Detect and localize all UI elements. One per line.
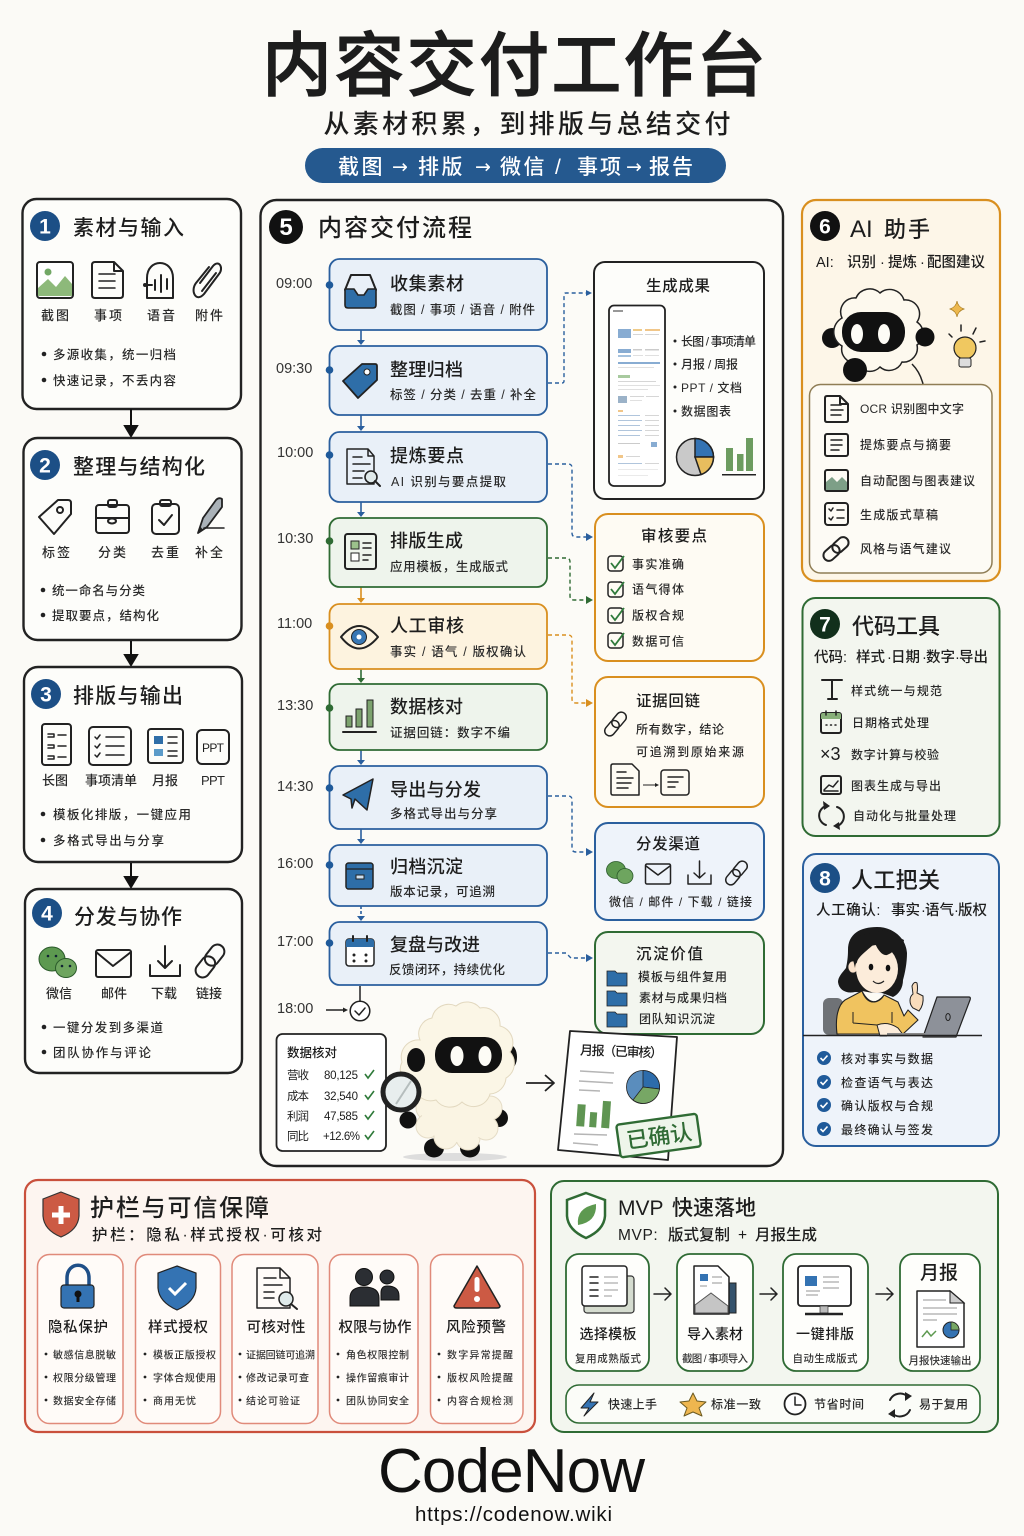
labels: 截图 <box>41 308 69 323</box>
tools list <box>810 384 992 573</box>
card: 导入素材 <box>677 1254 753 1371</box>
labels: 语音 <box>147 308 175 323</box>
icon: clipboard check <box>152 500 179 534</box>
report pie <box>626 1070 660 1104</box>
panel 6: AI 助手: · <box>920 255 925 271</box>
panel: MVP 快速落地: 快速落地 <box>672 1197 756 1220</box>
card: 证据回链: 可追溯到原始来源 <box>636 744 744 759</box>
labels: 事项 <box>94 308 122 323</box>
icon: clock <box>784 1394 806 1414</box>
monthly report: 月报（已审核） <box>580 1043 663 1060</box>
timeline times: 18:00 <box>277 1001 313 1017</box>
panel 7: 代码工具: 代码: <box>814 649 847 666</box>
card: 隐私保护: 数据安全存储 <box>53 1394 116 1408</box>
card: 分发渠道: 微信 / 邮件 / 下载 / 链接 <box>609 894 752 909</box>
bar chart <box>722 438 756 476</box>
card: 风险预警: 数字异常提醒 <box>447 1348 513 1362</box>
bullets: 一键分发到多渠道 <box>53 1020 163 1035</box>
labels: 附件 <box>195 308 223 323</box>
panel 3: 排版与输出 <box>24 667 242 862</box>
labels <box>42 773 225 788</box>
step: 归档沉淀 <box>326 845 547 906</box>
bullets <box>41 807 191 848</box>
card: 样式授权: 模板正版授权 <box>153 1348 216 1362</box>
panel 4: 分发与协作 <box>25 889 242 1073</box>
step: 整理归档: 整理归档 <box>390 360 463 380</box>
panel: MVP 快速落地: 版式复制 <box>668 1226 730 1244</box>
step: 提炼要点: AI 识别与要点提取 <box>391 474 506 489</box>
step: 提炼要点: 提炼要点 <box>390 446 464 466</box>
labels: 邮件 <box>101 986 127 1001</box>
result list: 数据图表 <box>681 404 731 418</box>
checklist: 确认版权与合规 <box>841 1098 933 1113</box>
bullets: 团队协作与评论 <box>53 1045 151 1060</box>
panel 2: 整理与结构化: 整理与结构化 <box>73 456 205 479</box>
card: 样式授权: 样式授权 <box>148 1319 208 1336</box>
icon: shield plus <box>43 1192 79 1237</box>
card: 证据回链: 证据回链 <box>636 692 700 710</box>
result list: PPT / 文档 <box>681 380 742 395</box>
result list: 月报 / 周报 <box>681 356 738 372</box>
benefits bar: 节省时间 <box>814 1396 864 1412</box>
card: 风险预警 <box>430 1254 523 1424</box>
process pill: → <box>475 156 491 178</box>
tools list: 风格与语气建议 <box>860 541 951 556</box>
panel: 护栏与可信保障: 护栏：隐私·样式授权·可核对 <box>92 1226 322 1244</box>
icon: layout <box>345 534 376 569</box>
card: 风险预警: 风险预警 <box>446 1318 506 1336</box>
data check table <box>276 1034 386 1151</box>
process pill: 事项 <box>577 156 623 179</box>
card: 权限与协作: 操作留痕审计 <box>346 1372 409 1384</box>
result list: 长图 / 事项清单 <box>681 334 756 348</box>
icon: bars <box>343 700 376 732</box>
checks <box>608 556 684 648</box>
icon: link <box>193 942 227 980</box>
bullets <box>41 583 159 623</box>
panel 5: 内容交付流程: 5 <box>279 214 293 241</box>
timeline times <box>276 276 313 1017</box>
panel: MVP 快速落地: + <box>738 1227 747 1244</box>
panel 7: 代码工具: 导出 <box>959 649 988 666</box>
card: 可核对性: 可核对性 <box>246 1318 306 1336</box>
icon: voice <box>143 263 173 298</box>
step: 整理归档 <box>326 346 547 415</box>
panel 7: 代码工具: · <box>922 650 927 666</box>
icon: long image <box>42 724 71 765</box>
bullets: 统一命名与分类 <box>52 583 145 598</box>
brand logo: CodeNow <box>378 1437 645 1506</box>
step: 收集素材 <box>326 259 547 330</box>
benefits bar: 易于复用 <box>919 1396 968 1412</box>
sparkle <box>950 301 964 317</box>
card: 月报: 月报 <box>920 1262 958 1284</box>
data check table: +12.6% <box>323 1131 360 1143</box>
panel 8: 人工把关 <box>803 854 999 1146</box>
panel 6: AI 助手: AI <box>850 216 873 243</box>
arrow to report <box>526 1075 554 1091</box>
step: 收集素材: 收集素材 <box>390 274 464 294</box>
checklist <box>817 1051 933 1137</box>
checklist: 核对事实与数据 <box>841 1051 933 1066</box>
labels <box>46 986 222 1001</box>
card: 可核对性 <box>232 1254 318 1424</box>
icon: shield leaf <box>567 1193 605 1238</box>
card: 一键排版: 一键排版 <box>796 1326 854 1342</box>
icon: image <box>37 262 73 298</box>
panel 6: AI 助手: 6 <box>819 216 831 238</box>
card: 风险预警: 版权风险提醒 <box>447 1372 513 1384</box>
step: 收集素材: 截图 / 事项 / 语音 / 附件 <box>390 302 535 317</box>
arrow 2 to 3 <box>125 641 137 665</box>
checklist: 检查语气与表达 <box>841 1075 933 1090</box>
labels: 月报 <box>152 773 178 788</box>
folders <box>607 971 627 1027</box>
icon: document <box>92 262 123 298</box>
card: 选择模板: 选择模板 <box>580 1326 636 1342</box>
tools list: 生成版式草稿 <box>860 507 938 522</box>
card: 可核对性: 证据回链可追溯 <box>246 1348 315 1362</box>
panel 7: 代码工具: · <box>887 650 892 666</box>
panel 6: AI 助手 <box>802 200 1000 581</box>
arrow 3 to 4 <box>125 863 137 887</box>
panel: MVP 快速落地: MVP <box>618 1197 664 1220</box>
bullets <box>42 1020 163 1060</box>
labels <box>42 545 223 560</box>
data check table: 同比 <box>287 1130 309 1143</box>
card: 隐私保护 <box>38 1254 123 1424</box>
panel 7: 代码工具: 数字 <box>926 648 955 666</box>
step: 数据核对: 证据回链：数字不编 <box>390 725 510 740</box>
panel 6: AI 助手: · <box>880 255 885 271</box>
panel 7: 代码工具: 数字计算与校验 <box>851 747 939 762</box>
light bulb <box>949 325 985 367</box>
icon: pencil <box>198 498 224 533</box>
dashed connectors <box>548 293 590 958</box>
bullets <box>42 347 176 388</box>
data check table: 47,585 <box>324 1111 358 1123</box>
stamp <box>616 1114 701 1158</box>
tools list: OCR 识别图中文字 <box>860 401 964 416</box>
step: 复盘与改进: 复盘与改进 <box>390 935 480 955</box>
panel: 护栏与可信保障: 护栏与可信保障 <box>90 1195 269 1222</box>
process pill: 排版 <box>418 156 465 179</box>
bullets: 多格式导出与分享 <box>53 833 164 848</box>
icon: folder case <box>96 500 129 533</box>
step: 人工审核: 人工审核 <box>390 615 464 636</box>
panel 5: 内容交付流程 <box>260 200 783 1166</box>
icon: bolt <box>581 1393 598 1416</box>
step: 数据核对 <box>326 684 547 750</box>
benefits bar: 快速上手 <box>608 1396 657 1412</box>
step: 数据核对: 数据核对 <box>390 697 463 717</box>
icon: archive box <box>346 863 373 889</box>
tools list: 提炼要点与摘要 <box>860 437 951 452</box>
card: 沉淀价值: 团队知识沉淀 <box>639 1011 715 1026</box>
panel 3: 排版与输出: 3 <box>40 684 52 706</box>
icon: doc search <box>347 449 380 486</box>
labels: 链接 <box>196 986 222 1001</box>
panel 8: 人工把关: 人工把关 <box>851 868 940 893</box>
labels: 微信 <box>46 986 72 1001</box>
panel: 护栏与可信保障 <box>25 1180 535 1432</box>
icon: eye <box>341 626 378 648</box>
icon: wechat <box>39 947 76 978</box>
card: 月报 <box>900 1254 980 1371</box>
icon: star <box>680 1393 706 1416</box>
process pill: 截图 <box>338 156 385 179</box>
step: 导出与分发: 导出与分发 <box>390 780 481 800</box>
labels: 事项清单 <box>85 773 137 788</box>
panel 1: 素材与输入 <box>22 199 241 409</box>
panel 8: 人工把关: 版权 <box>958 902 987 919</box>
process pill: 报告 <box>649 156 695 179</box>
panel: MVP 快速落地: 月报生成 <box>755 1226 817 1244</box>
icon: type <box>822 680 842 699</box>
panel 7: 代码工具: 自动化与批量处理 <box>853 808 956 823</box>
icon: calendar <box>346 936 374 966</box>
labels <box>41 308 223 323</box>
panel 6: AI 助手: 配图建议 <box>927 253 985 271</box>
card: 选择模板: 复用成熟版式 <box>575 1352 642 1365</box>
bullets: 提取要点，结构化 <box>52 608 159 623</box>
timeline times: 13:30 <box>277 698 313 714</box>
person illustration <box>803 927 982 1037</box>
card: 生成成果 <box>594 262 764 499</box>
timeline times: 11:00 <box>277 616 312 632</box>
checklist: 最终确认与签发 <box>841 1122 933 1137</box>
phone mockup <box>609 306 665 486</box>
channel icons <box>606 859 749 887</box>
icon: calendar <box>821 711 841 733</box>
card: 风险预警: 内容合规检测 <box>447 1394 513 1408</box>
data check table: 成本 <box>287 1089 310 1103</box>
card: 证据回链 <box>595 677 764 807</box>
icon: tag <box>39 500 71 534</box>
labels: 长图 <box>42 773 68 788</box>
panel 8: 人工把关: · <box>954 903 959 919</box>
panel 6: AI 助手: 助手 <box>884 217 932 242</box>
card: 选择模板 <box>566 1254 649 1371</box>
step: 导出与分发: 多格式导出与分享 <box>390 806 497 821</box>
icon: ppt <box>197 730 229 764</box>
card: 隐私保护: 隐私保护 <box>48 1319 108 1336</box>
timeline times: 14:30 <box>277 779 313 795</box>
panel 8: 人工把关: 语气 <box>925 902 954 919</box>
step: 提炼要点 <box>326 432 547 502</box>
card: 样式授权 <box>136 1254 220 1424</box>
card: 生成成果: 生成成果 <box>646 277 710 295</box>
panel 5: 内容交付流程: 内容交付流程 <box>318 215 472 242</box>
panel 7: 代码工具: 7 <box>819 614 831 636</box>
card: 权限与协作: 团队协同安全 <box>346 1394 409 1408</box>
panel 4: 分发与协作: 4 <box>41 902 53 926</box>
icon: doc to doc <box>611 764 689 795</box>
step: 归档沉淀: 版本记录，可追溯 <box>390 884 495 899</box>
process pill: 微信 <box>500 156 547 179</box>
labels: 去重 <box>151 545 179 560</box>
panel: MVP 快速落地: MVP: <box>618 1227 658 1244</box>
card: 沉淀价值: 模板与组件复用 <box>638 969 727 984</box>
panel 3: 排版与输出: 排版与输出 <box>73 685 183 708</box>
card: 样式授权: 商用无忧 <box>153 1394 196 1408</box>
panel 2: 整理与结构化: 2 <box>39 454 51 478</box>
timeline times: 17:00 <box>277 934 313 950</box>
icon: paperclip <box>194 263 221 297</box>
step: 归档沉淀: 归档沉淀 <box>390 857 463 877</box>
step connectors <box>357 330 365 921</box>
timeline times: 16:00 <box>277 856 313 872</box>
icon: mail <box>96 950 131 977</box>
monthly report <box>558 1031 701 1160</box>
timeline times: 10:30 <box>277 531 313 547</box>
timeline times: 10:00 <box>277 445 313 461</box>
panel 8: 人工把关: 8 <box>819 868 831 890</box>
card: 可核对性: 结论可验证 <box>246 1394 300 1408</box>
panel 2: 整理与结构化 <box>24 438 242 640</box>
icon: paper plane <box>343 779 373 810</box>
sheep head <box>822 289 934 384</box>
bullets: 模板化排版，一键应用 <box>53 807 191 822</box>
icon: sync <box>888 1392 912 1418</box>
data check table: 利润 <box>287 1109 309 1123</box>
step: 导出与分发 <box>326 766 547 829</box>
panel 7: 代码工具 <box>802 598 1000 836</box>
checks: 语气得体 <box>632 582 684 596</box>
card: 隐私保护: 敏感信息脱敏 <box>53 1348 116 1362</box>
panel: MVP 快速落地 <box>551 1181 998 1432</box>
card: 样式授权: 字体合规使用 <box>153 1372 216 1384</box>
url: https://codenow.wiki <box>415 1503 612 1526</box>
subtitle: 从素材积累，到排版与总结交付 <box>324 109 730 139</box>
card: 审核要点: 审核要点 <box>641 526 707 545</box>
card: 月报: 月报快速输出 <box>908 1354 972 1367</box>
panel 1: 素材与输入: 1 <box>39 216 51 238</box>
icon: download <box>150 946 180 976</box>
panel 6: AI 助手: AI: <box>816 255 834 271</box>
process pill: → <box>626 156 642 178</box>
data check table: 80,125 <box>324 1070 358 1082</box>
bullets: 多源收集，统一归档 <box>53 347 176 362</box>
icon: checklist <box>89 727 131 765</box>
card: 分发渠道 <box>595 823 764 920</box>
labels: 分类 <box>98 545 126 560</box>
timeline end <box>326 986 370 1021</box>
text: x3: ×3 <box>820 744 841 764</box>
card: 审核要点 <box>595 514 764 661</box>
panel 7: 代码工具: · <box>955 650 960 666</box>
panel 7: 代码工具: 代码工具 <box>852 614 940 639</box>
data check table: 营收 <box>287 1068 310 1082</box>
step: 人工审核: 事实 / 语气 / 版权确认 <box>390 644 526 659</box>
card: 证据回链: 所有数字，结论 <box>636 722 724 736</box>
card: 沉淀价值: 沉淀价值 <box>636 944 703 963</box>
panel 6: AI 助手: 提炼 <box>888 254 917 271</box>
card: 一键排版 <box>783 1254 868 1371</box>
pie chart <box>676 438 714 476</box>
data check table: 数据核对 <box>287 1045 337 1060</box>
panel 8: 人工把关: 事实 <box>891 901 920 919</box>
icon: sync <box>819 801 844 830</box>
card: 导入素材: 导入素材 <box>687 1326 743 1342</box>
process pill: → <box>392 156 408 178</box>
card: 可核对性: 修改记录可查 <box>246 1372 309 1384</box>
panel 7: 代码工具: 日期 <box>891 649 920 666</box>
panel 8: 人工把关: 人工确认: <box>816 902 881 919</box>
benefits bar: 标准一致 <box>711 1398 761 1412</box>
card: 权限与协作: 角色权限控制 <box>346 1348 409 1362</box>
step: 整理归档: 标签 / 分类 / 去重 / 补全 <box>390 387 536 402</box>
timeline times: 09:30 <box>276 361 312 377</box>
card: 沉淀价值 <box>595 932 764 1034</box>
card: 导入素材: 截图 / 事项导入 <box>682 1352 748 1365</box>
icon: link <box>603 710 628 738</box>
icon: inbox <box>345 275 376 308</box>
panel 7: 代码工具: 日期格式处理 <box>852 715 929 730</box>
icon: chart <box>821 776 841 794</box>
result list <box>674 334 756 418</box>
panel 6: AI 助手: 识别 <box>847 254 876 271</box>
labels: 标签 <box>42 545 70 560</box>
arrow 1 to 2 <box>125 409 137 436</box>
connector arrowheads <box>586 290 593 962</box>
step: 人工审核 <box>326 604 547 669</box>
checks: 数据可信 <box>632 634 684 648</box>
checks: 版权合规 <box>632 608 684 622</box>
title: 内容交付工作台 <box>262 27 766 105</box>
labels: 下载 <box>151 986 177 1001</box>
checks: 事实准确 <box>632 556 684 572</box>
sheep mascot with magnifier <box>383 1002 517 1161</box>
panel 7: 代码工具: 样式 <box>856 649 885 666</box>
card: 权限与协作: 权限与协作 <box>338 1319 412 1336</box>
card: 沉淀价值: 素材与成果归档 <box>639 990 727 1005</box>
card: 分发渠道: 分发渠道 <box>636 834 700 853</box>
stamp: 已确认 <box>625 1120 694 1153</box>
data check table: 32,540 <box>324 1091 358 1103</box>
panel 8: 人工把关: · <box>921 903 926 919</box>
panel 7: 代码工具: 样式统一与规范 <box>851 683 942 698</box>
step: 排版生成: 应用模板，生成版式 <box>390 559 508 574</box>
step: 排版生成: 排版生成 <box>390 531 463 551</box>
icon: monthly layout <box>148 729 183 763</box>
card: 权限与协作 <box>330 1254 418 1424</box>
labels: PPT <box>201 773 225 788</box>
step: 复盘与改进 <box>326 922 547 985</box>
icon: tag <box>343 364 377 398</box>
benefits bar <box>566 1385 980 1423</box>
bullets: 快速记录，不丢内容 <box>53 373 176 388</box>
icon: ppt: PPT <box>202 741 225 755</box>
process pill: / <box>555 156 561 179</box>
card: 隐私保护: 权限分级管理 <box>53 1372 116 1384</box>
step: 复盘与改进: 反馈闭环，持续优化 <box>389 962 505 977</box>
step arrows <box>654 1288 893 1300</box>
labels: 补全 <box>195 545 223 560</box>
panel 4: 分发与协作: 分发与协作 <box>74 906 182 929</box>
process pill <box>305 148 726 183</box>
tools list: 自动配图与图表建议 <box>860 473 975 488</box>
step: 排版生成 <box>326 518 547 587</box>
panel 1: 素材与输入: 素材与输入 <box>73 217 184 240</box>
card: 一键排版: 自动生成版式 <box>792 1352 858 1365</box>
timeline times: 09:00 <box>276 276 312 292</box>
panel 7: 代码工具: 图表生成与导出 <box>851 778 941 793</box>
